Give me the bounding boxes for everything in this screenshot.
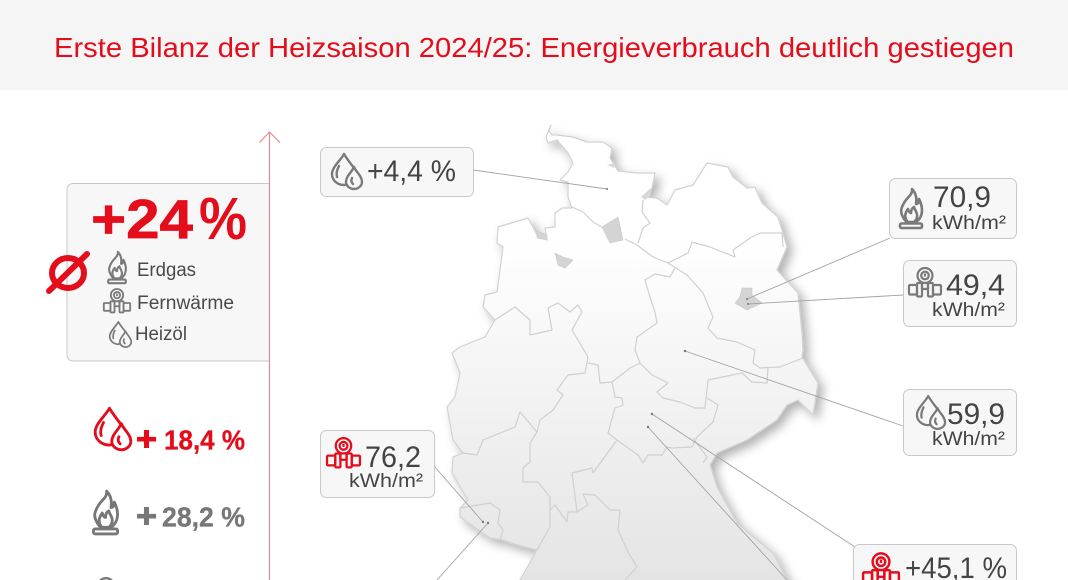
- callout: Schleswig-Holstein +4,4 %: [320, 148, 474, 196]
- legend: Heizöl: Heizöl: [135, 324, 187, 345]
- callout: 49,4 kWh/m²: 49,4: [946, 269, 1005, 302]
- stat: Erdgas +28,2 %: 28,2 %: [162, 502, 245, 532]
- callout: 49,4 kWh/m²: [904, 260, 1016, 326]
- legend: Erdgas: Erdgas: [137, 260, 196, 281]
- callout: 70,9 kWh/m²: [890, 178, 1016, 238]
- callout: 59,9 kWh/m²: [904, 390, 1016, 456]
- stat: Erdgas +28,2 %: +: [136, 497, 157, 534]
- average box: [67, 184, 270, 361]
- city states: Hamburg, Bremen, Berlin: [537, 163, 762, 310]
- callout: Schleswig-Holstein +4,4 %: +4,4 %: [367, 155, 456, 188]
- vertical arrow: [260, 132, 280, 580]
- average value: +24: [91, 188, 193, 250]
- stat: Erdgas +28,2 %: [93, 491, 245, 534]
- callout: 70,9 kWh/m²: kWh/m²: [932, 213, 1006, 234]
- stat: Heizöl +18,4 %: +: [136, 420, 157, 457]
- callout: 49,4 kWh/m²: kWh/m²: [932, 300, 1005, 321]
- stat: Fernwärme icon (cropped): [89, 578, 123, 580]
- average value: [91, 186, 247, 252]
- legend: Heizöl: [110, 322, 187, 347]
- callout: 59,9 kWh/m²: kWh/m²: [932, 429, 1005, 450]
- callout: 59,9 kWh/m²: 59,9: [947, 398, 1005, 431]
- callout: +45,1 %: [854, 544, 1016, 580]
- title: Erste Bilanz der Heizsaison 2024/25: Energieverbrauch deutlich gestiegen: [54, 32, 1014, 63]
- callout: 76,2 kWh/m²: 76,2: [365, 441, 421, 474]
- average symbol: [49, 254, 87, 291]
- callout: 76,2 kWh/m²: kWh/m²: [349, 471, 423, 492]
- map of Germany: [447, 125, 818, 580]
- callout: 76,2 kWh/m²: [320, 430, 434, 498]
- state borders: [460, 200, 803, 580]
- title banner: [0, 0, 1068, 90]
- stat: Heizöl +18,4 %: [95, 408, 245, 457]
- legend: Fernwärme: Fernwärme: [137, 293, 234, 314]
- legend: Erdgas: [108, 252, 196, 283]
- stat: Heizöl +18,4 %: 18,4 %: [164, 424, 245, 456]
- connector lines: [434, 170, 903, 580]
- average value: %: [199, 186, 247, 252]
- callout: 70,9 kWh/m²: 70,9: [933, 181, 991, 214]
- legend: Fernwärme: [104, 289, 234, 314]
